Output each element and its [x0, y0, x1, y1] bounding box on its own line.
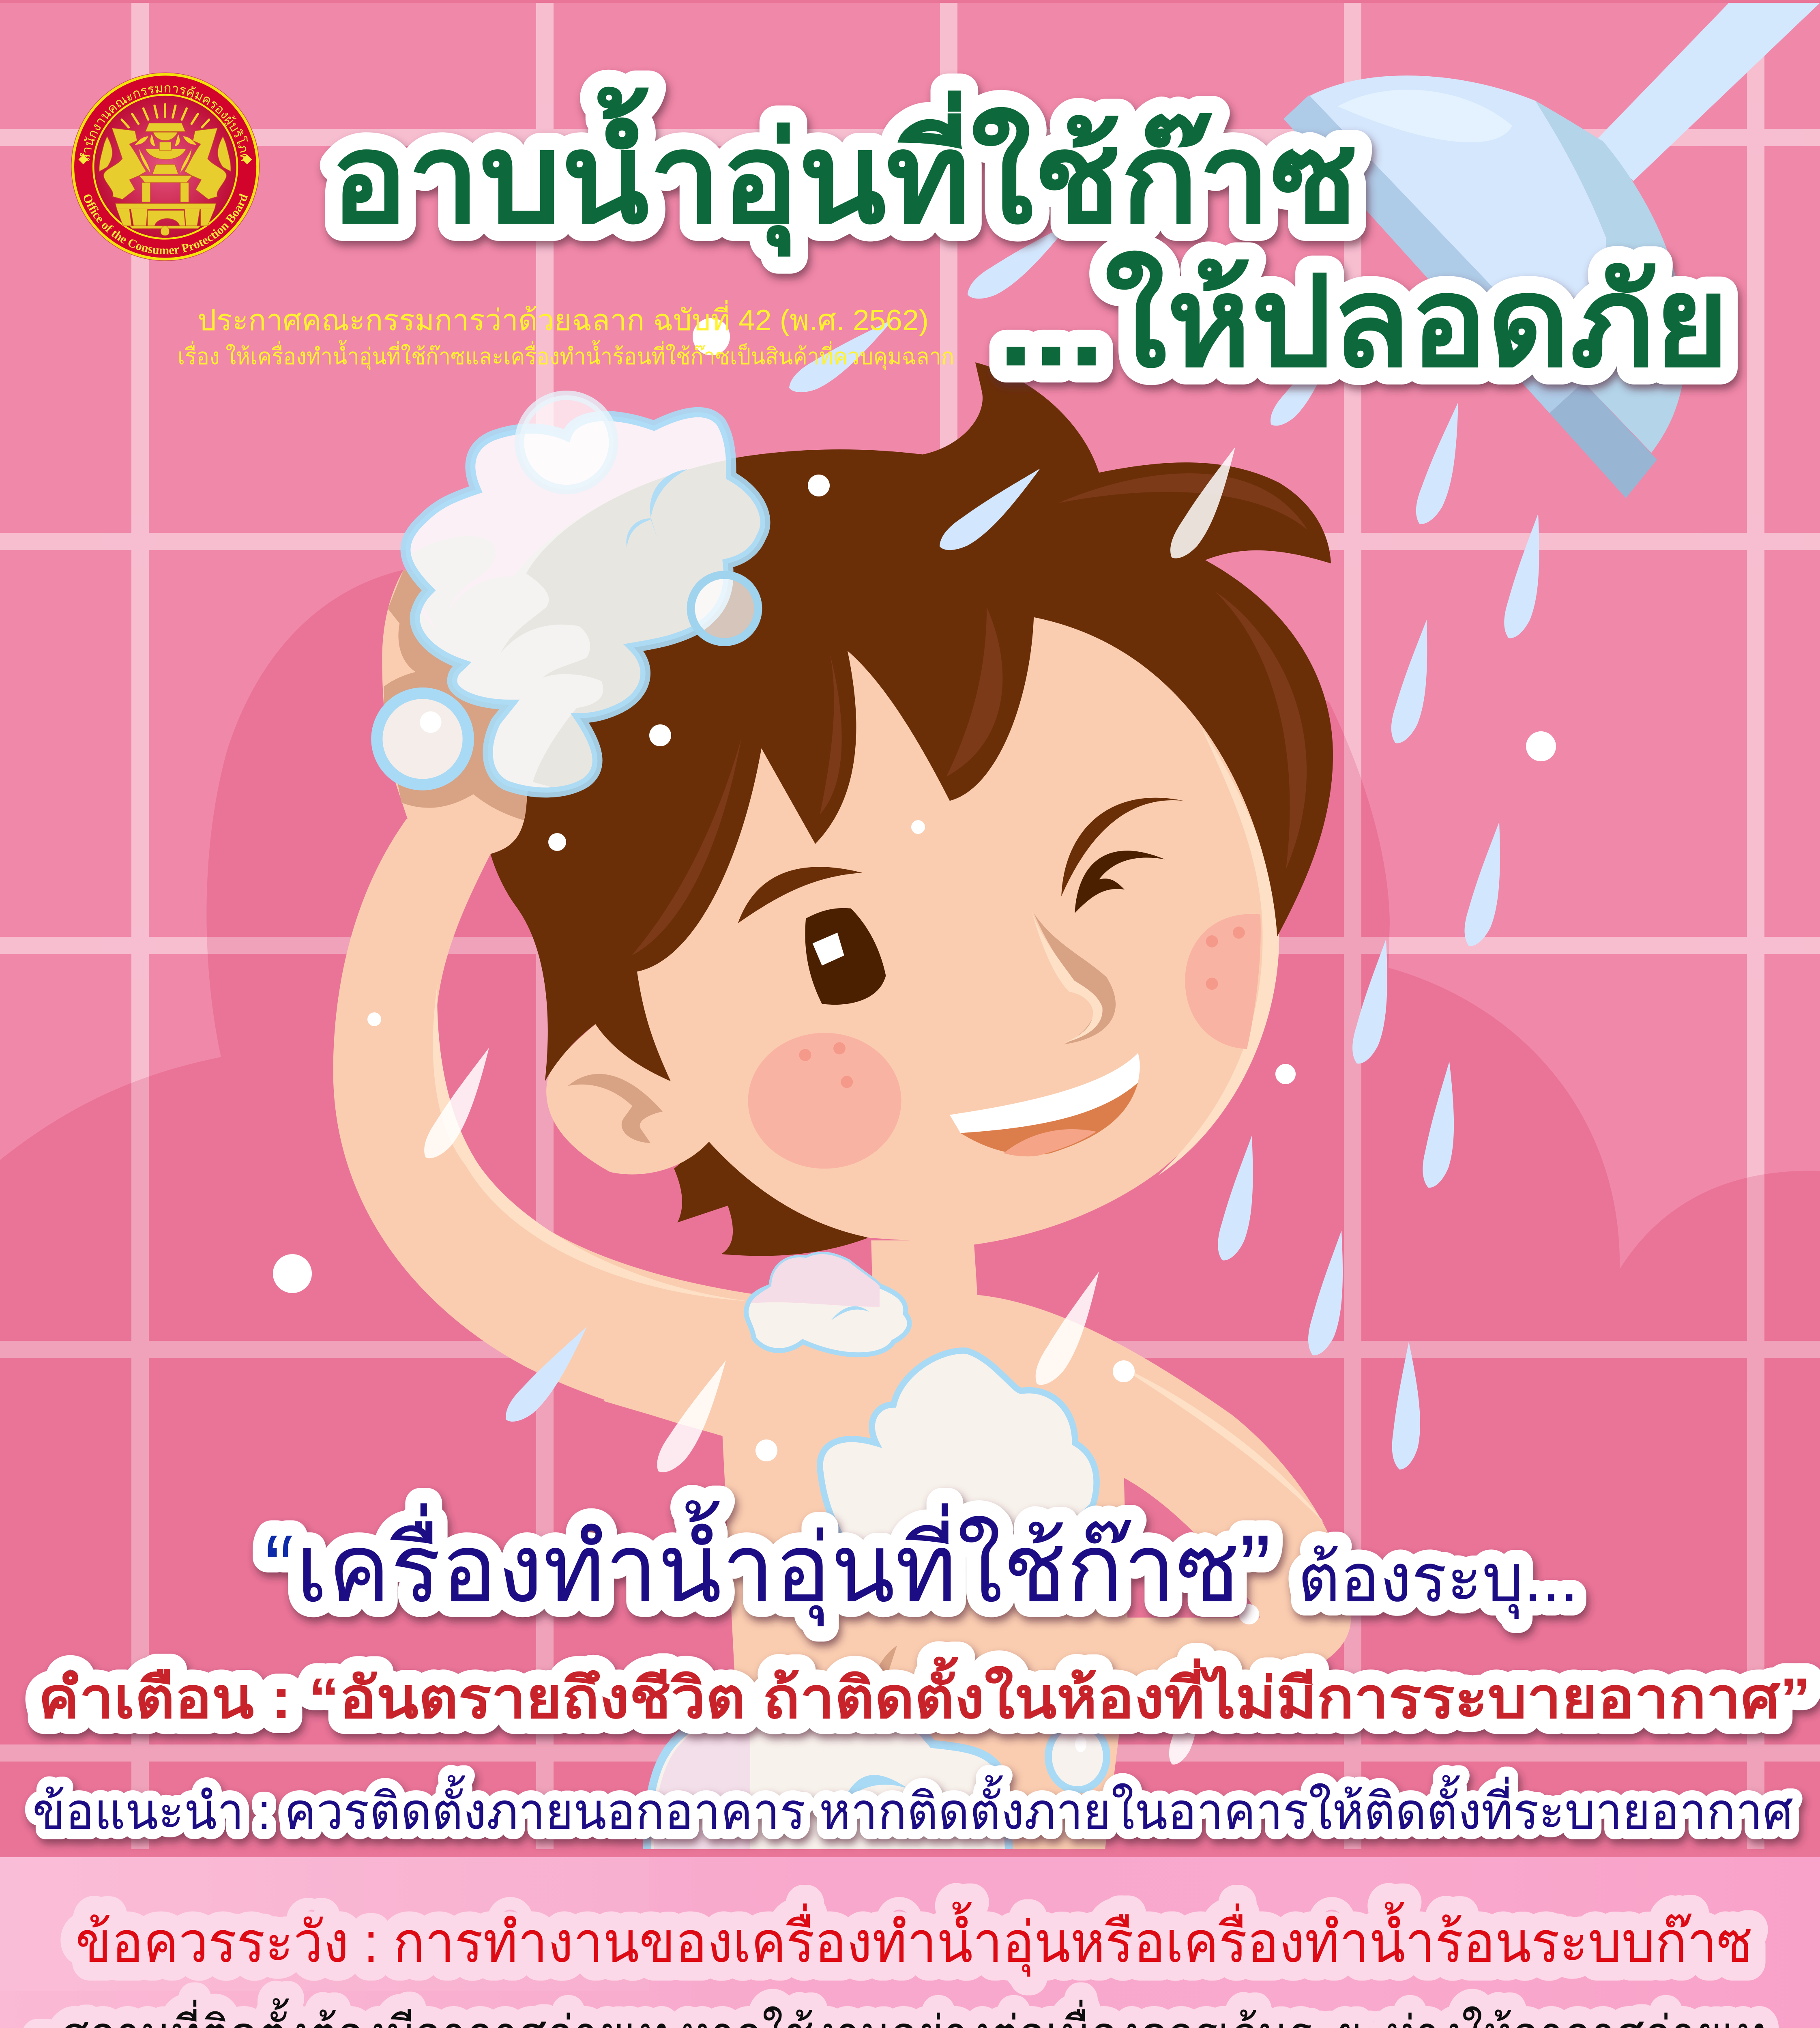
- title: main heading: [331, 86, 1729, 392]
- illustration: boy washing hair: [333, 362, 1351, 1866]
- title: main heading: อาบน้ำอุ่นที่ใช้ก๊าซ: [331, 86, 1358, 257]
- logo: Office of the Consumer Protection Board seal: Office of the Consumer Protection Board: [80, 192, 251, 257]
- heading: gas water heater must state: [264, 1500, 1578, 1626]
- logo: Office of the Consumer Protection Board seal: สำนักงานคณะกรรมการคุ้มครองผู้บริโภค: [77, 81, 253, 163]
- logo: Office of the Consumer Protection Board seal: [71, 73, 259, 261]
- head: hair, face and features: [491, 362, 1333, 1256]
- title: main heading: ...ให้ปลอดภัย: [998, 249, 1729, 392]
- lower foam and bubble: [647, 1716, 1107, 1866]
- raised left arm and hand: [333, 782, 876, 1441]
- icon: shower head: [1283, 3, 1820, 498]
- subtitle: regulation reference: เรื่อง ให้เครื่องทำน้ำอุ่นที่ใช้ก๊าซและเครื่องทำน้ำร้อนที่ใช้ก๊าซเป็นสินค้าที่ควบคุมฉลาก: [178, 340, 954, 370]
- panel: cautions: [0, 1857, 1820, 2028]
- subtitle: regulation reference: [178, 300, 954, 370]
- warning text: คำเตือน : “อันตรายถึงชีวิต ถ้าติดตั้งในห้องที่ไม่มีการระบายอากาศ”: [38, 1656, 1811, 1730]
- torso and right arm: [604, 1240, 1351, 1849]
- water droplets: white dots: [273, 318, 1556, 1624]
- water drops: [417, 215, 1555, 1768]
- foam on shoulder and chest: [746, 1254, 1097, 1569]
- foam on head with bubbles: [377, 392, 795, 809]
- heading: gas water heater must state: ต้องระบุ...: [1298, 1541, 1578, 1619]
- heading: gas water heater must state: “เครื่องทำน้ำอุ่นที่ใช้ก๊าซ”: [264, 1500, 1271, 1626]
- subtitle: regulation reference: ประกาศคณะกรรมการว่าด้วยฉลาก ฉบับที่ 42 (พ.ศ. 2562): [197, 300, 929, 337]
